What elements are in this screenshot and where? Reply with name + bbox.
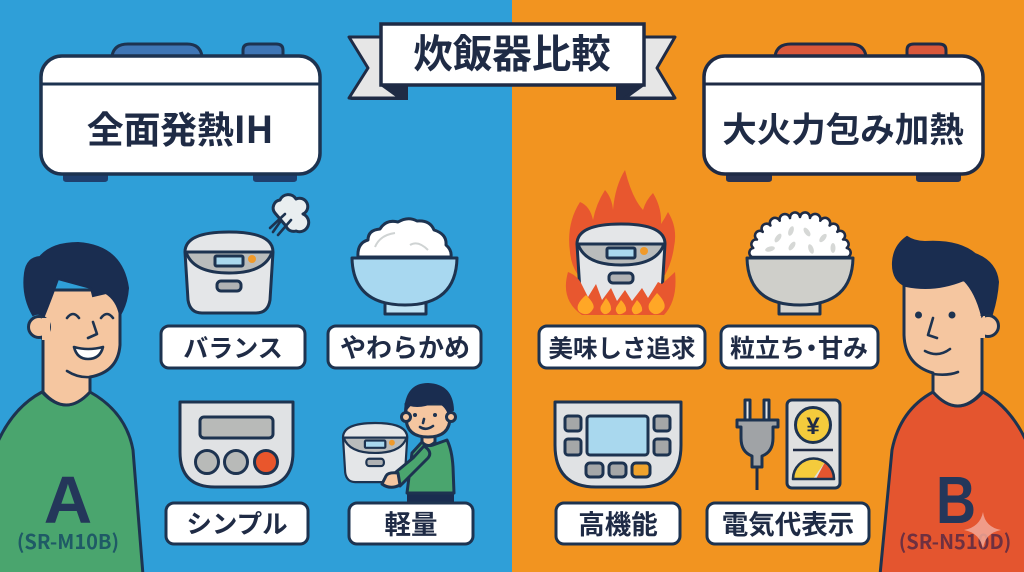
title text: 炊飯器比較 — [413, 23, 611, 80]
rice dome — [749, 212, 851, 257]
icon: electricity cost card — [787, 400, 840, 488]
ear B — [978, 316, 998, 336]
prongs — [745, 400, 750, 422]
torso — [407, 440, 454, 493]
yen coin — [796, 408, 830, 442]
jaw line A — [67, 371, 90, 377]
icon: firm rice bowl — [747, 212, 853, 314]
right box feet — [726, 174, 961, 182]
nose A — [88, 322, 97, 338]
person A — [0, 243, 143, 572]
hand — [382, 473, 400, 487]
display — [587, 416, 648, 455]
icon: rice cooker with steam — [185, 195, 309, 313]
jaw line B — [933, 372, 958, 375]
right box lid tabs — [775, 44, 946, 56]
pants — [407, 490, 454, 503]
left box heading: 全面発熱IH — [87, 100, 273, 154]
bowl — [747, 258, 853, 305]
label: 軽量 — [349, 503, 473, 544]
hair A — [24, 243, 128, 316]
icon: person carrying cooker — [343, 384, 456, 503]
hair — [405, 384, 453, 412]
left box lid tabs — [112, 44, 283, 56]
display — [200, 417, 273, 438]
face — [413, 413, 437, 429]
icon: fluffy rice bowl — [352, 219, 457, 314]
label: バランス — [161, 326, 305, 368]
ribbon left tail — [349, 37, 400, 98]
plug body — [737, 420, 778, 467]
wire — [756, 465, 758, 490]
panel: left cooker box 全面発熱IH — [41, 44, 320, 182]
rice grains — [765, 225, 836, 255]
label: 電気代表示: 電気代表示 — [722, 503, 854, 542]
ribbon main band — [381, 24, 644, 85]
left box feet — [63, 174, 297, 182]
flame cores — [578, 293, 665, 314]
panel body — [555, 402, 681, 487]
label: 軽量: 軽量 — [384, 503, 438, 542]
label: シンプル — [166, 503, 308, 544]
icon: advanced control panel — [555, 402, 681, 487]
label: 高機能 — [556, 503, 680, 544]
model B: (SR-N510D) — [899, 526, 1011, 555]
icon: electricity cost card: ¥ — [806, 413, 820, 440]
letter A: A — [44, 463, 92, 538]
flame cooker — [577, 224, 665, 305]
label: やわらかめ: やわらかめ — [340, 328, 470, 365]
label: 高機能: 高機能 — [578, 503, 658, 542]
ribbon left fold — [349, 85, 408, 100]
shirt B — [880, 392, 1024, 572]
ribbon right fold — [616, 85, 675, 100]
person B — [880, 237, 1024, 572]
bowl — [352, 258, 457, 305]
ribbon right tail — [625, 37, 675, 98]
label: 美味しさ追求: 美味しさ追求 — [548, 330, 696, 365]
rice — [358, 219, 451, 257]
sparkle — [964, 512, 1001, 549]
panel: right cooker box 大火力包み加熱 — [704, 44, 983, 182]
icon: rice cooker in flames — [566, 170, 676, 315]
shirt A — [0, 392, 143, 572]
label: 粒立ち・甘み: 粒立ち・甘み — [730, 329, 868, 365]
bowl foot — [385, 303, 426, 314]
steam cloud — [273, 195, 309, 232]
right box heading: 大火力包み加熱 — [722, 102, 964, 152]
label: バランス: バランス — [183, 329, 283, 365]
hair B — [893, 237, 998, 316]
neck and face A — [42, 290, 120, 405]
model A: (SR-M10B) — [17, 526, 119, 555]
eyes B — [915, 312, 922, 318]
orange button — [632, 463, 650, 477]
nose B — [928, 318, 937, 338]
title ribbon — [349, 23, 675, 100]
label: シンプル: シンプル — [186, 504, 288, 541]
front flames — [566, 272, 676, 315]
small cooker — [343, 423, 407, 482]
left box body — [41, 56, 320, 174]
ear A — [28, 316, 50, 338]
background: orange side — [512, 0, 1024, 572]
buttons — [196, 450, 218, 474]
icon: electric plug — [737, 400, 778, 490]
head — [406, 404, 450, 437]
ears — [402, 412, 410, 422]
icon: simple control panel — [180, 402, 293, 487]
cooker body — [185, 232, 273, 313]
letter B: B — [936, 463, 976, 538]
side buttons — [565, 416, 670, 477]
bowl foot — [779, 303, 820, 314]
eyes A — [67, 314, 113, 318]
neck — [422, 432, 435, 446]
panel body — [180, 402, 293, 487]
back flames — [569, 170, 675, 275]
neck and face B — [904, 280, 982, 406]
divider — [793, 449, 833, 451]
gauge — [793, 458, 834, 479]
right box body — [704, 56, 983, 174]
mouth B — [925, 349, 950, 354]
mouth A — [74, 347, 103, 359]
background: blue side — [0, 0, 512, 572]
arm — [396, 446, 430, 486]
card — [787, 400, 840, 488]
